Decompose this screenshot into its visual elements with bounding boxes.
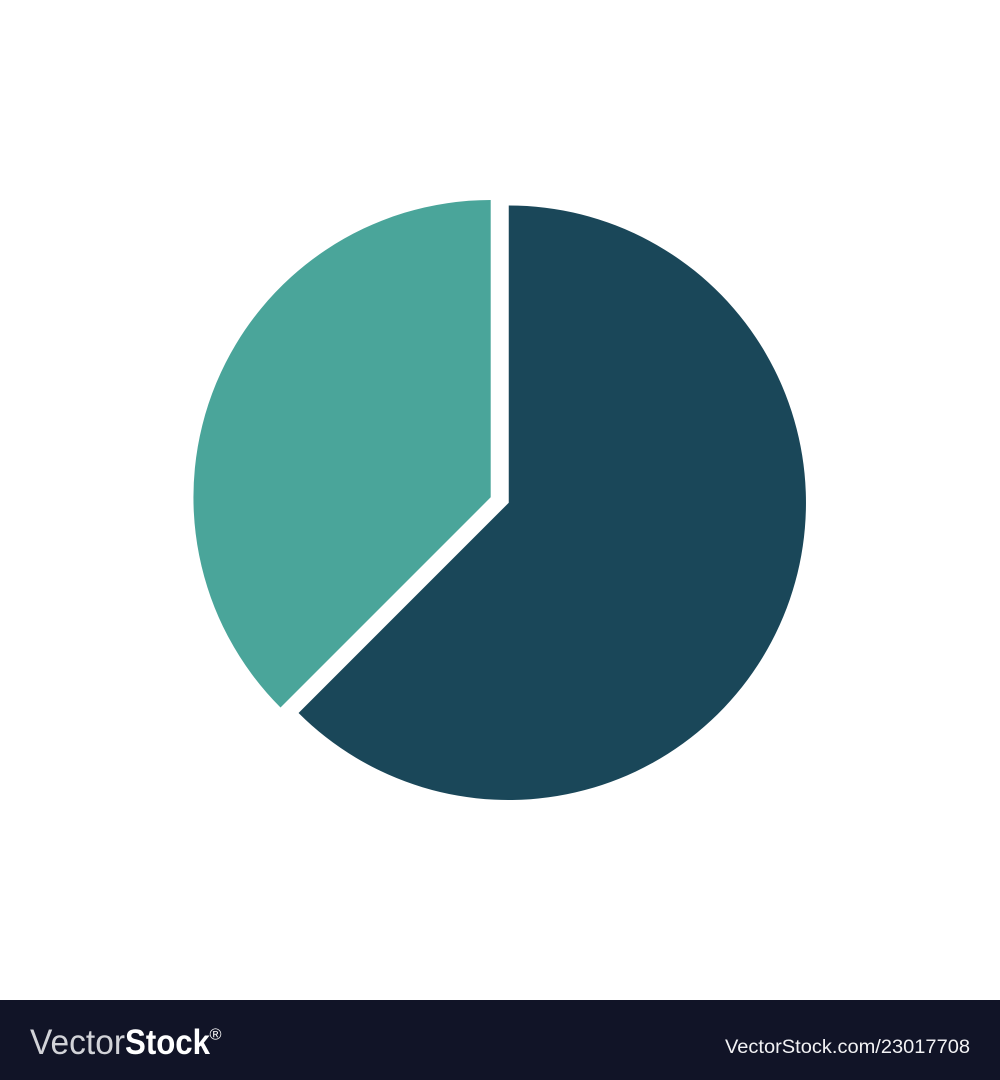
footer bar	[0, 1000, 1000, 1080]
pie slice: dark blue, larger share	[299, 206, 806, 800]
image id: VectorStock.com/23017708	[725, 1037, 970, 1058]
pie chart	[193, 200, 806, 800]
logo: VectorStock: Vector	[30, 1023, 125, 1062]
logo: VectorStock: ®	[210, 1026, 222, 1044]
pie slice: teal, smaller share	[193, 200, 491, 708]
logo: VectorStock	[30, 1023, 222, 1062]
logo: VectorStock: Stock	[125, 1023, 210, 1062]
